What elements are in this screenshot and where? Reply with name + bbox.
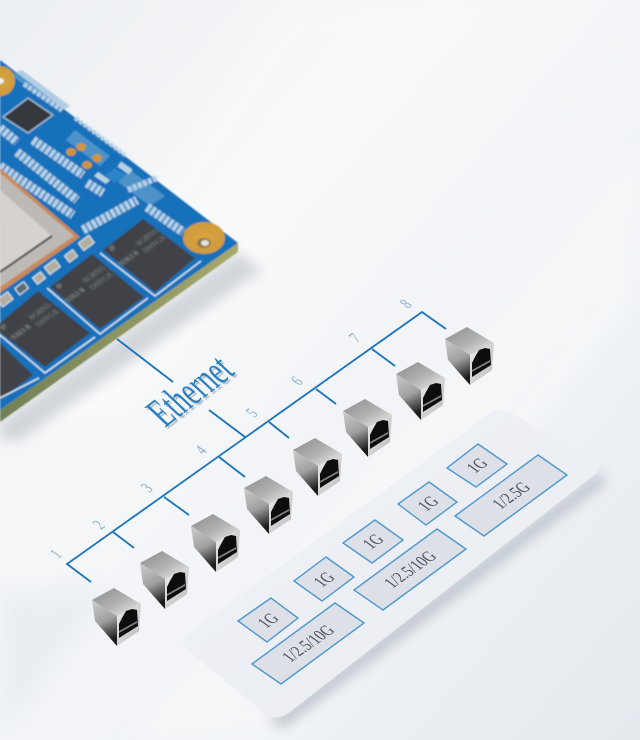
speed labels: 1G	[413, 493, 444, 514]
memory chip 4	[0, 343, 33, 400]
RJ45 port 4	[244, 476, 293, 534]
connection lines	[67, 312, 446, 582]
bus line	[67, 312, 446, 582]
circuit board	[0, 60, 238, 422]
port numbers: 6	[288, 374, 308, 389]
RJ45 port 6	[343, 399, 392, 457]
memory chip 1	[103, 219, 195, 292]
Ethernet label: Ethernet	[136, 346, 243, 435]
board edge	[0, 243, 238, 422]
memory chip 2	[50, 254, 144, 329]
memory chip 2: D9TGX	[87, 270, 116, 291]
port numbers: 2	[90, 518, 110, 533]
memory chip 1: 9263 8	[116, 249, 141, 267]
board shadow	[0, 252, 262, 440]
memory chip 3: 8GBN5	[26, 301, 54, 321]
RJ45 port 2	[140, 551, 189, 609]
RJ45 port 3	[191, 514, 240, 572]
speed box 1G port 6	[343, 520, 403, 563]
speed labels: 1/2.5/10G	[380, 548, 441, 591]
Ethernet label: Ethernet	[138, 348, 245, 437]
speed labels	[253, 455, 535, 665]
RJ45 port 1	[92, 588, 141, 646]
gold mounting hole, left	[0, 66, 15, 96]
speed box 1/2.5G	[455, 455, 567, 536]
port numbers: 8	[397, 297, 417, 312]
speed box 1/2.5/10G lower	[252, 603, 364, 684]
panel shadow	[268, 472, 606, 728]
RJ45 port 7	[396, 362, 445, 420]
speed box 1G port 7	[398, 482, 457, 525]
small parts	[94, 162, 132, 184]
silver processor	[0, 168, 80, 293]
port numbers: 1	[47, 547, 67, 562]
speed box 1G port 5	[294, 557, 354, 601]
memory chip 2: 9263 8	[62, 286, 87, 304]
board surface	[0, 60, 238, 410]
memory chip 1: 8GBN5	[133, 227, 161, 247]
RJ45 port 5	[293, 438, 342, 496]
chip outlines	[0, 253, 201, 398]
port numbers: 5	[243, 406, 263, 421]
speed box 1/2.5/10G upper	[354, 529, 466, 610]
panel plate	[184, 410, 600, 717]
speed labels: 1G	[462, 455, 493, 476]
gold pads	[66, 143, 102, 169]
memory chip 1: D9TGX	[140, 233, 169, 254]
RJ45 port 8	[445, 327, 494, 385]
speed labels: 1/2.5G	[488, 479, 535, 512]
small chip	[3, 98, 53, 133]
speed labels: 1G	[309, 569, 340, 590]
memory chip 2: 8GBN5	[80, 264, 108, 284]
panel: port speeds	[184, 410, 600, 717]
port numbers: 3	[138, 481, 158, 496]
speed labels: 1G	[358, 531, 389, 552]
board to Ethernet label line	[117, 339, 173, 382]
gold mounting hole	[183, 222, 225, 254]
speed box 1G port 1	[238, 598, 298, 642]
speed labels: 1G	[253, 610, 284, 631]
port numbers: 4	[192, 443, 212, 458]
speed labels: 1/2.5/10G	[278, 622, 339, 665]
speed box 1G port 8	[447, 444, 507, 487]
light copper areas	[10, 70, 165, 206]
memory chip 3	[0, 291, 90, 367]
port numbers: 7	[346, 331, 366, 346]
pin rows	[0, 84, 183, 232]
memory chip 3: 9263 8	[8, 323, 33, 341]
port numbers	[47, 297, 417, 562]
memory chip 3: D9TGX	[33, 307, 62, 328]
capacitors	[0, 235, 94, 307]
